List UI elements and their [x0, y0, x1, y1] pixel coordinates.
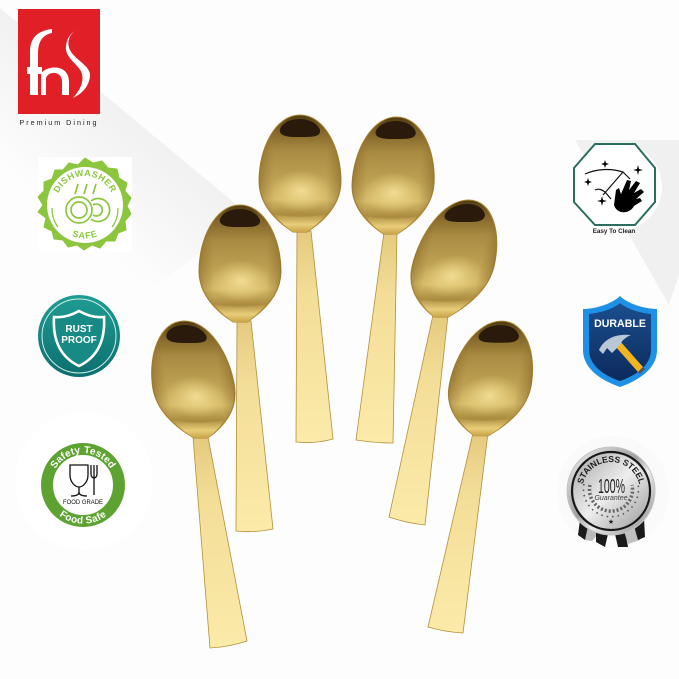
badge: durable [583, 296, 657, 387]
badge: durable: DURABLE [594, 318, 646, 330]
badge: stainless steel guarantee: 100% [598, 476, 625, 498]
logo: FnS Premium Dining: Premium Dining [19, 118, 99, 127]
badge: dishwasher safe: SAFE [72, 230, 98, 239]
background panel: top-left diagonal [0, 8, 250, 400]
badge: rust proof: PROOF [61, 335, 97, 346]
spoon 5: middle right [389, 200, 509, 525]
badge: food safe [41, 443, 125, 527]
badge: dishwasher safe: DISHWASHER [53, 170, 116, 193]
badge: rust proof [38, 295, 120, 377]
badge: easy to clean: Easy To Clean [593, 228, 635, 235]
spoon 4: top right-centre [349, 117, 438, 443]
badge: stainless steel guarantee: ★ [608, 518, 614, 526]
badge: food safe: Safety Tested [50, 446, 116, 468]
badge: dishwasher safe [38, 157, 132, 250]
spoon 6: far right [428, 321, 543, 633]
spoon 3: far left [143, 321, 247, 648]
badge: stainless steel guarantee [566, 446, 656, 547]
badge: stainless steel guarantee: Guarantee [594, 495, 628, 502]
background panel: right triangle [575, 140, 679, 305]
badge: easy to clean [574, 143, 662, 235]
badge: rust proof: RUST [65, 324, 93, 335]
logo: FnS Premium Dining [18, 9, 100, 127]
badge: stainless steel guarantee: STAINLESS STEEL [578, 456, 644, 484]
badge: food safe: Food Safe [60, 510, 106, 524]
badge: food safe: FOOD GRADE [63, 499, 103, 506]
spoon 1: top left-centre [259, 115, 341, 443]
spoon 2: middle left [199, 205, 281, 532]
